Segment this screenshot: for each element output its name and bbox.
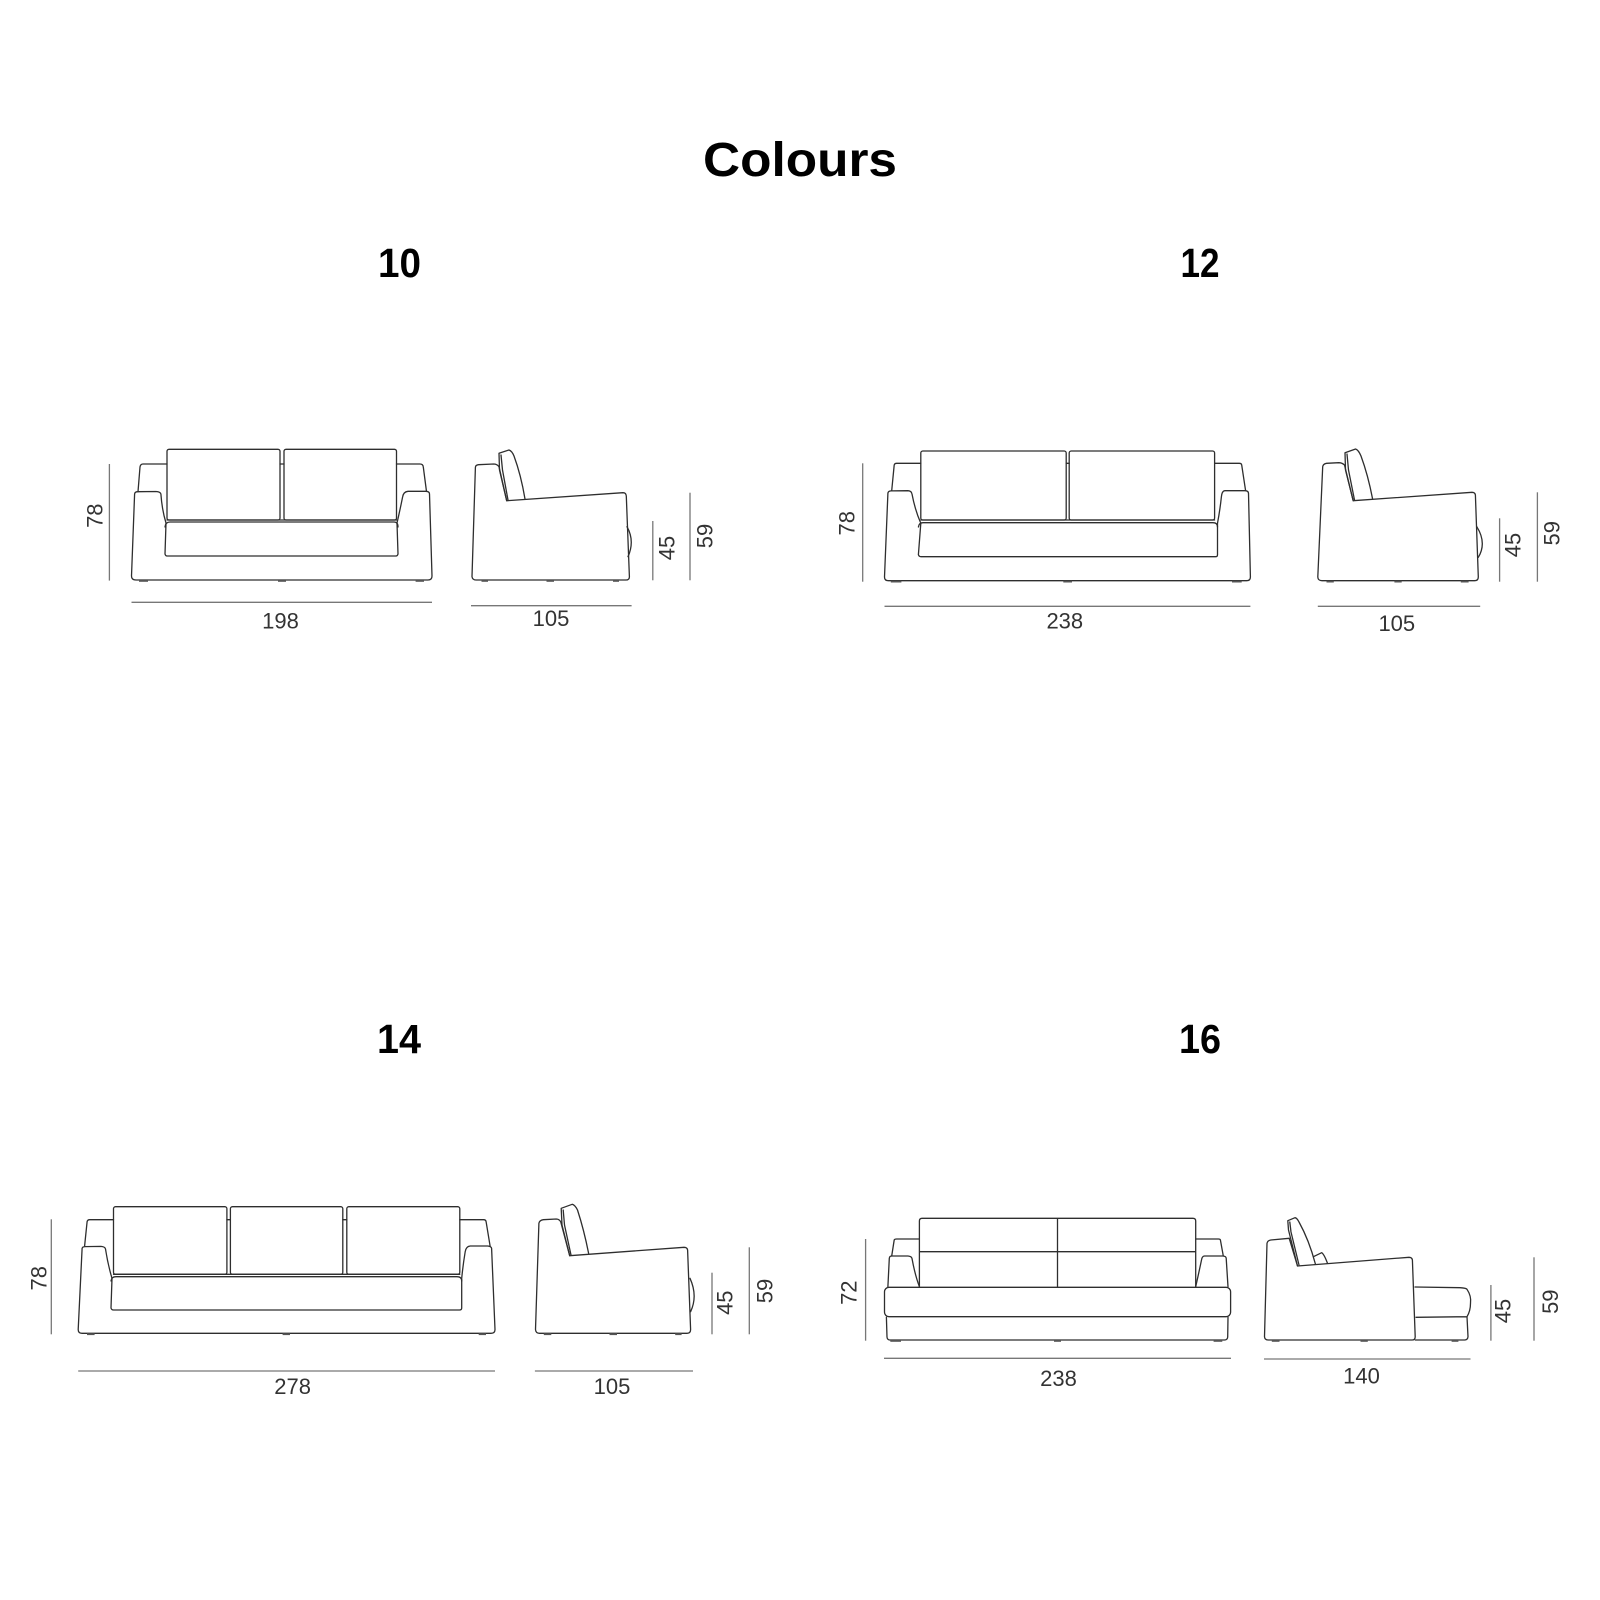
front view sofa 12 bbox=[884, 451, 1250, 582]
dimension: width 278: 278 bbox=[274, 1374, 311, 1399]
front view sofa 16 bbox=[884, 1218, 1231, 1342]
dimension: width 238: 238 bbox=[1040, 1366, 1077, 1391]
dimension: arm 59 bbox=[749, 1247, 777, 1334]
dimension: seat 45: 45 bbox=[1501, 533, 1526, 557]
dimension: seat 45: 45 bbox=[713, 1290, 738, 1315]
dimension: height 78 bbox=[834, 463, 863, 582]
side view sofa 16 bbox=[1264, 1218, 1471, 1342]
dimension: depth 105: 105 bbox=[594, 1374, 630, 1399]
dimension: height 78: 78 bbox=[834, 511, 859, 536]
dimension: seat 45 bbox=[712, 1273, 738, 1334]
heading: 10: 10 bbox=[378, 240, 421, 286]
dimension: seat 45 bbox=[1491, 1285, 1516, 1341]
dimension: height 78 bbox=[27, 1219, 52, 1334]
title: Colours bbox=[703, 134, 897, 187]
dimension: arm 59: 59 bbox=[752, 1279, 777, 1303]
dimension: arm 59 bbox=[1534, 1257, 1563, 1341]
dimension: arm 59: 59 bbox=[1540, 521, 1565, 546]
dimension: width 238: 238 bbox=[1046, 608, 1083, 634]
dimension: width 198: 198 bbox=[262, 608, 299, 634]
dimension: height 78: 78 bbox=[82, 503, 107, 528]
dimension: seat 45: 45 bbox=[655, 536, 680, 560]
dimension: height 72 bbox=[837, 1239, 866, 1341]
panel: model 10 bbox=[82, 240, 718, 634]
panel: model 16 bbox=[837, 1016, 1563, 1391]
side view sofa 14 bbox=[536, 1204, 694, 1335]
dimension: depth 105: 105 bbox=[533, 606, 569, 631]
dimension: seat 45 bbox=[653, 521, 680, 580]
dimension: height 78: 78 bbox=[27, 1266, 52, 1291]
side view sofa 10 bbox=[472, 450, 631, 582]
dimension: arm 59: 59 bbox=[693, 524, 718, 548]
dimension: depth 140: 140 bbox=[1343, 1364, 1380, 1388]
dimension: height 78 bbox=[82, 464, 109, 581]
panel: model 14 bbox=[27, 1016, 777, 1399]
dimension: depth 105: 105 bbox=[1378, 611, 1415, 636]
front view sofa 14 bbox=[78, 1207, 495, 1335]
dimension: height 72: 72 bbox=[837, 1280, 862, 1305]
dimension: arm 59: 59 bbox=[1538, 1289, 1563, 1314]
dimension: seat 45: 45 bbox=[1491, 1299, 1516, 1323]
heading: 14: 14 bbox=[377, 1016, 421, 1062]
side view sofa 12 bbox=[1318, 449, 1482, 582]
dimension: arm 59 bbox=[690, 493, 718, 580]
heading: 12: 12 bbox=[1180, 240, 1220, 286]
dimension: seat 45 bbox=[1500, 518, 1526, 582]
front view sofa 10 bbox=[132, 449, 432, 582]
dimension: arm 59 bbox=[1537, 492, 1565, 582]
panel: model 12 bbox=[834, 240, 1565, 636]
heading: 16: 16 bbox=[1179, 1016, 1221, 1062]
